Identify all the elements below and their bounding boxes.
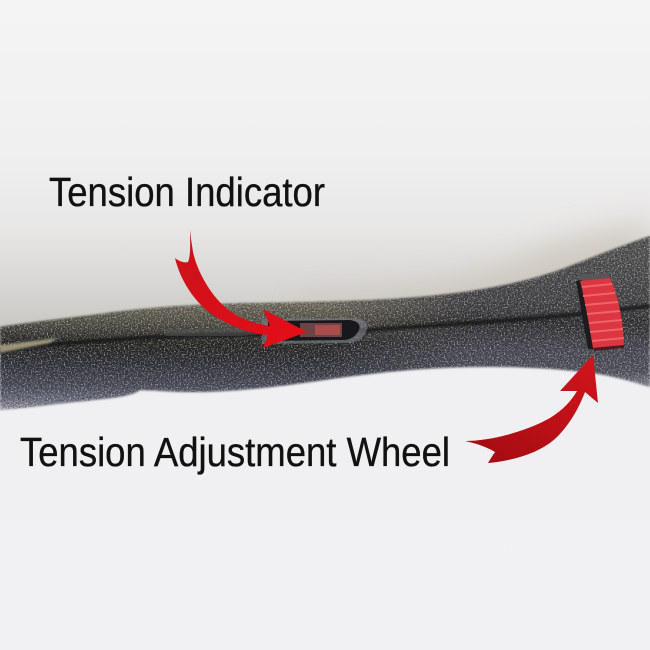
indicator window [300, 323, 342, 337]
tension indicator slot [262, 318, 367, 344]
arrow: tension indicator [175, 230, 307, 348]
wheel ribs [582, 284, 624, 341]
label: tension adjustment wheel: Tension Adjustment Wheel [20, 429, 450, 475]
handle shadow [300, 222, 650, 320]
label: tension indicator: Tension Indicator [49, 169, 325, 215]
product photo infographic [0, 176, 650, 475]
adjustment wheel [576, 273, 624, 351]
ridge detail [165, 327, 262, 336]
seam line [0, 306, 650, 352]
arrow: adjustment wheel [465, 355, 598, 463]
racquet handle [0, 236, 650, 410]
glossy highlight [0, 338, 58, 353]
wheel housing [578, 273, 610, 281]
